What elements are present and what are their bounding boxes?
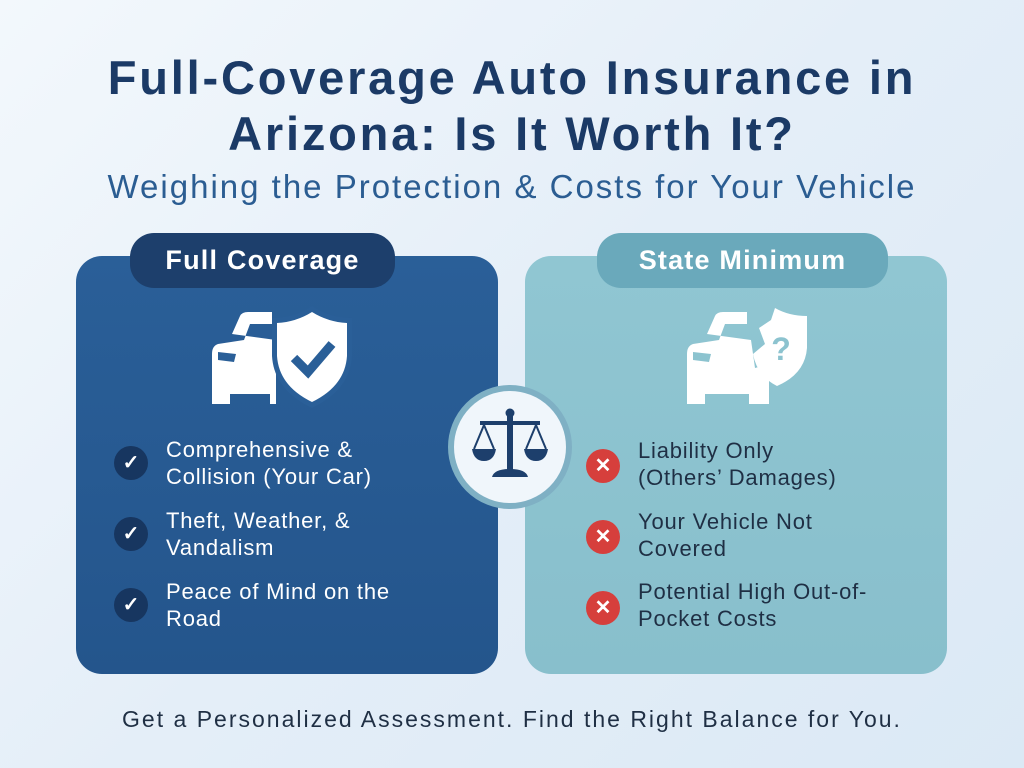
panel: state minimum xyxy=(525,256,947,674)
panel: full coverage: Road xyxy=(166,606,222,631)
icon: car with cracked shield xyxy=(687,308,807,404)
panel: state minimum: ✕ xyxy=(595,597,611,619)
subtitle: Weighing the Protection & Costs for Your Vehicle xyxy=(108,168,916,205)
panel: full coverage: Peace of Mind on the xyxy=(166,579,390,604)
panel: state minimum: Your Vehicle Not xyxy=(638,509,813,534)
icon: car with cracked shield: ? xyxy=(771,331,791,367)
panel: state minimum: Covered xyxy=(638,536,727,561)
panel: state minimum: Liability Only xyxy=(638,438,774,463)
panel: state minimum: Potential High Out-of- xyxy=(638,579,867,604)
panel: full coverage: Vandalism xyxy=(166,535,274,560)
icon: car with shield check xyxy=(212,312,347,404)
panel: full coverage xyxy=(76,256,498,674)
item 1 xyxy=(586,438,837,490)
panel: full coverage: ✓ xyxy=(123,452,139,474)
panel: full coverage: Theft, Weather, & xyxy=(166,508,350,533)
icon: scales in circle xyxy=(448,385,572,509)
tab: full coverage xyxy=(130,233,395,288)
panel: state minimum: (Others’ Damages) xyxy=(638,465,837,490)
item 1 xyxy=(114,437,372,489)
item 3 xyxy=(586,579,867,631)
title: Arizona: Is It Worth It? xyxy=(228,107,796,160)
tab: full coverage: Full Coverage xyxy=(165,245,360,275)
panel: full coverage: ✓ xyxy=(123,594,139,616)
item 3 xyxy=(114,579,390,631)
title xyxy=(108,51,916,160)
tab: state minimum xyxy=(597,233,888,288)
title: Full-Coverage Auto Insurance in xyxy=(108,51,916,104)
panel: full coverage: Comprehensive & xyxy=(166,437,353,462)
item 2 xyxy=(586,509,813,561)
panel: state minimum: ✕ xyxy=(595,526,611,548)
panel: state minimum: ✕ xyxy=(595,455,611,477)
panel: full coverage: Collision (Your Car) xyxy=(166,464,372,489)
footer text: Get a Personalized Assessment. Find the Right Balance for You. xyxy=(122,706,902,732)
item 2 xyxy=(114,508,350,560)
panel: state minimum: Pocket Costs xyxy=(638,606,777,631)
panel: full coverage: ✓ xyxy=(123,523,139,545)
tab: state minimum: State Minimum xyxy=(639,245,846,275)
